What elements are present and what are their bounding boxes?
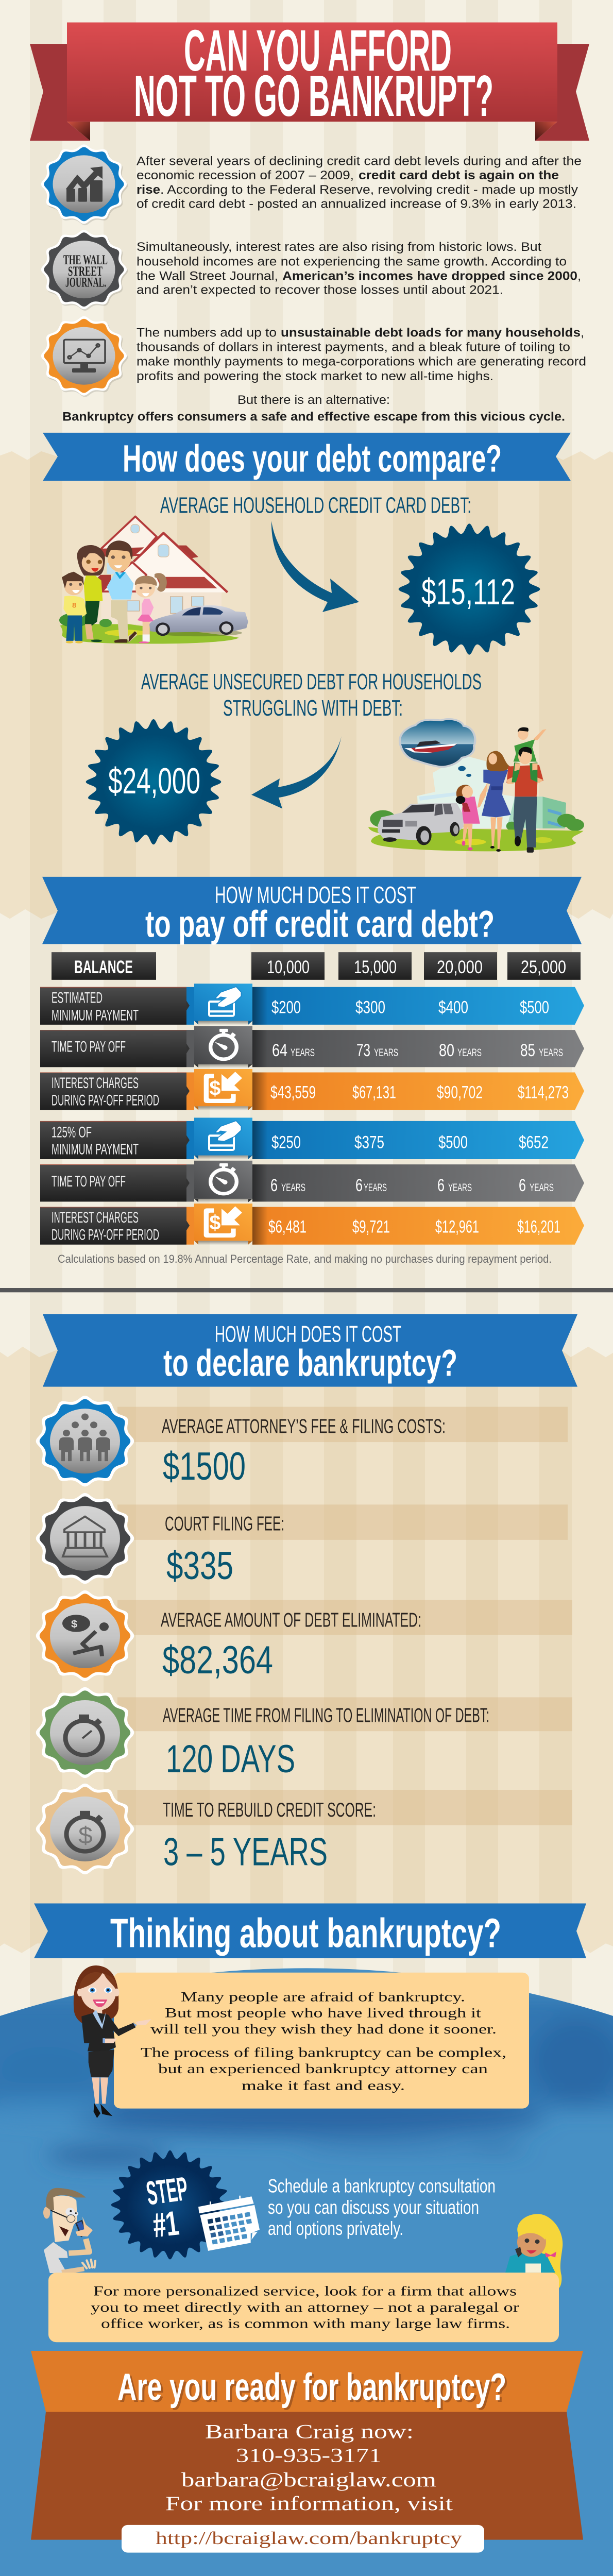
paragraph 2: American’s incomes have dropped since 2000 [282,269,577,283]
row: 125% of minimum payment: 125% OF [52,1124,92,1141]
row: time to pay off: 73 [356,1040,370,1060]
badge: stopwatch [36,1687,134,1778]
row: time to pay off, 125%: 6 [270,1175,278,1195]
burst: $15,112 [399,524,540,654]
badge: Wall Street Journal: THE WALL [63,252,108,267]
paragraph 3: The numbers add up to [137,326,277,340]
step 1 description: Schedule a bankruptcy consultation [268,2176,496,2197]
contact panel [31,2412,583,2540]
paragraph 3: profits and powering the stock market to new all-time highs. [137,369,493,383]
badge: people [36,1396,134,1486]
illustration: man on phone [43,2188,95,2273]
row: time to pay off, 125%: 6 [519,1175,526,1195]
paragraph 1: After several years of declining credit card debt levels during and after the [137,154,582,168]
row: interest charges: DURING PAY-OFF PERIOD [52,1091,159,1109]
banner: are you ready for bankruptcy [31,2351,583,2412]
row: 125% of minimum payment: $375 [354,1132,384,1152]
callout: afraid of bankruptcy: but an experienced bankruptcy attorney can [158,2061,488,2077]
item: rebuild credit score: TIME TO REBUILD CREDIT SCORE: [163,1798,376,1821]
table header [52,952,581,980]
row: 125% of minimum payment: $500 [438,1132,468,1152]
callout: afraid of bankruptcy: will tell you they wish they had done it sooner. [150,2022,497,2037]
row: time to pay off: YEARS [374,1046,398,1059]
arrow: struggling household to amount [251,736,342,808]
girl with doll [456,785,480,851]
burst: $24,000 [86,719,221,844]
illustration: family with house and car [59,516,248,644]
illustration: family dreaming of boat [368,719,584,853]
row: time to pay off: TIME TO PAY OFF [52,1038,126,1055]
row: estimated minimum payment: MINIMUM PAYMENT [52,1007,139,1024]
man [106,540,137,643]
item: time to elimination: 120 DAYS [166,1737,295,1781]
illustration: blonde woman on phone [505,2214,563,2290]
row: interest charges, 125%: INTEREST CHARGES [52,1209,139,1226]
item: attorney fee [36,1396,568,1488]
paragraph 2: household incomes are not experiencing the same growth. According to [137,255,567,269]
banner: thinking about bankruptcy [34,1903,586,1958]
row: time to pay off, 125%: YEARS [281,1181,305,1194]
callout: afraid of bankruptcy [114,1973,529,2109]
badge: rising chart [41,145,128,225]
row: interest charges, 125%: DURING PAY-OFF PERIOD [52,1226,159,1243]
row: time to pay off: YEARS [457,1046,482,1059]
burst: step 1 [111,2150,229,2259]
row: interest charges: $114,273 [518,1082,569,1102]
item: rebuild credit score: 3 – 5 YEARS [163,1829,328,1874]
row: estimated minimum payment: $300 [355,997,385,1017]
paragraph 3: make monthly payments to mega-corporations which are generating record [137,354,586,368]
paragraph 3: thousands of dollars in interest payments, and a bleak future of toiling to [137,340,570,354]
step 1 description: so you can discuss your situation [268,2197,479,2218]
paragraph 2 [137,240,581,297]
illustration: presenter woman [74,1965,151,2118]
table header: 15,000 [354,957,397,977]
row: interest charges, 125%: $6,481 [268,1217,306,1236]
row: 125% of minimum payment: MINIMUM PAYMENT [52,1141,139,1158]
url box [122,2525,484,2553]
burst: $24,000: $24,000 [108,760,200,801]
heading: average unsecured debt [141,669,482,720]
paragraph 2: Simultaneously, interest rates are also rising from historic lows. But [137,240,541,254]
callout: afraid of bankruptcy: But most people who have lived through it [165,2006,481,2021]
arrow: household to amount [271,521,359,612]
thought bubble with boat [400,719,475,777]
paragraph 1: credit card debt is again on the [359,168,559,182]
row: 125% of minimum payment: $250 [271,1132,301,1152]
woman [77,545,105,642]
item: debt eliminated [36,1590,572,1682]
banner: cost to declare bankruptcy [43,1314,577,1387]
row: interest charges, 125%: $9,721 [352,1217,390,1236]
callout: afraid of bankruptcy: make it fast and easy. [242,2078,405,2093]
row: time to pay off: YEARS [539,1046,563,1059]
row: interest charges, 125%: $16,201 [517,1217,560,1236]
father and boy [506,727,547,853]
callout: personalized service: For more personalized service, look for a firm that allows [93,2283,517,2299]
title text [134,18,493,128]
row: estimated minimum payment: ESTIMATED [52,989,103,1006]
banner: cost to pay off credit card debt [42,877,582,945]
step 1 description: and options privately. [268,2218,403,2240]
row: interest charges, 125% [40,1204,584,1245]
item: debt eliminated: $82,364 [162,1638,273,1682]
row: interest charges [40,1069,584,1111]
row: time to pay off: 80 [439,1040,454,1060]
row: interest charges, 125%: $12,961 [435,1217,479,1236]
item: court filing fee [36,1493,568,1587]
callout: afraid of bankruptcy: Many people are afraid of bankruptcy. [181,1989,465,2005]
item: rebuild credit score [36,1784,572,1874]
table header: 20,000 [437,957,483,977]
row: time to pay off, 125%: YEARS [364,1181,387,1194]
paragraph 3: unsustainable debt loads for many households [281,326,581,340]
row: interest charges: INTEREST CHARGES [52,1074,139,1092]
paragraph 1 [137,154,582,211]
blue cloud dome [0,1968,613,2576]
item: attorney fee: $1500 [163,1444,246,1488]
car [149,605,248,636]
row: time to pay off: 85 [520,1040,535,1060]
row: interest charges: $90,702 [437,1082,483,1102]
banner: cost to declare bankruptcy: to declare bankruptcy? [163,1342,457,1384]
paragraph 1: economic recession of 2007 – 2009, [137,168,354,182]
banner: cost to declare bankruptcy: HOW MUCH DOES IT COST [215,1321,401,1347]
item: time to elimination [36,1687,572,1781]
title ribbon [30,18,589,141]
row: time to pay off: 64 [272,1040,287,1060]
burst: step 1: STEP [144,2170,190,2212]
callout: personalized service: office worker, as is common with many large law firms. [101,2316,510,2331]
table header: BALANCE [74,957,133,977]
contact panel: Barbara Craig now: [205,2420,414,2443]
row: 125% of minimum payment [40,1117,584,1160]
row: estimated minimum payment: $400 [438,997,468,1017]
contact panel: For more information, visit [165,2493,453,2515]
paragraph 2: and aren’t expected to recover those losses until about 2021. [137,283,503,297]
row: time to pay off, 125% [40,1161,584,1202]
badge: dollar stopwatch [36,1784,134,1874]
callout: personalized service [48,2273,559,2342]
row: interest charges: $43,559 [270,1082,316,1102]
table header: 10,000 [267,957,310,977]
suv [378,803,464,845]
alternative statement: But there is an alternative: [237,393,390,407]
boy [62,572,87,643]
step 1 description [268,2176,496,2240]
item: debt eliminated: AVERAGE AMOUNT OF DEBT ELIMINATED: [161,1608,421,1631]
row: estimated minimum payment: $200 [271,997,301,1017]
alternative statement: Bankruptcy offers consumers a safe and effective escape from this vicious cycle. [62,410,565,423]
paragraph 2: the Wall Street Journal, [137,269,278,283]
badge: person carrying debt: $ [71,1619,77,1630]
burst: step 1: #1 [150,2204,181,2245]
badge: courthouse [36,1493,134,1584]
callout: personalized service: you to meet directly with an attorney – not a paralegal or [91,2300,520,2315]
heading: average unsecured debt: STRUGGLING WITH DEBT: [223,695,403,720]
paragraph 1: rise [137,183,160,197]
row: interest charges: $67,131 [352,1082,396,1102]
icon: calendar [198,2196,260,2251]
table header: 25,000 [521,957,566,977]
row: 125% of minimum payment: $652 [519,1132,549,1152]
badge: Wall Street Journal: STREET [68,264,103,279]
url box: http://bcraiglaw.com/bankruptcy [156,2528,463,2548]
paragraph 1: of credit card debt - posted an annualized increase of 9.3% in early 2013. [137,197,576,211]
row: time to pay off [40,1026,584,1068]
row: time to pay off, 125%: TIME TO PAY OFF [52,1173,126,1190]
callout: afraid of bankruptcy: The process of filing bankruptcy can be complex, [141,2045,506,2060]
item: court filing fee: COURT FILING FEE: [165,1512,284,1535]
row: estimated minimum payment [40,984,584,1025]
paragraph 3: , [581,326,584,340]
badge: monitor chart [41,316,128,397]
burst: $15,112: $15,112 [421,572,515,613]
row: estimated minimum payment: $500 [520,997,549,1017]
badge: person carrying debt [36,1590,134,1681]
row: time to pay off, 125%: 6 [437,1175,445,1195]
paragraph 3 [137,326,586,383]
banner: cost to pay off credit card debt: HOW MUCH DOES IT COST [215,882,416,908]
paragraph 2: , [577,269,581,283]
boy: 8 [72,601,76,609]
row: time to pay off: YEARS [291,1046,315,1059]
paragraph 1: . According to the Federal Reserve, revolving credit - made up mostly [160,183,578,197]
row: time to pay off, 125%: YEARS [448,1181,472,1194]
contact panel: 310-935-3171 [236,2444,382,2466]
row: time to pay off, 125%: YEARS [530,1181,554,1194]
badge: Wall Street Journal [41,230,128,311]
item: court filing fee: $335 [166,1544,233,1587]
alternative statement [62,393,565,423]
contact panel: barbara@bcraiglaw.com [181,2468,436,2491]
girl [135,573,167,643]
mother [478,751,515,852]
badge: dollar stopwatch: $ [78,1822,93,1849]
badge: Wall Street Journal: JOURNAL. [65,275,106,290]
row: time to pay off, 125%: 6 [355,1175,363,1195]
